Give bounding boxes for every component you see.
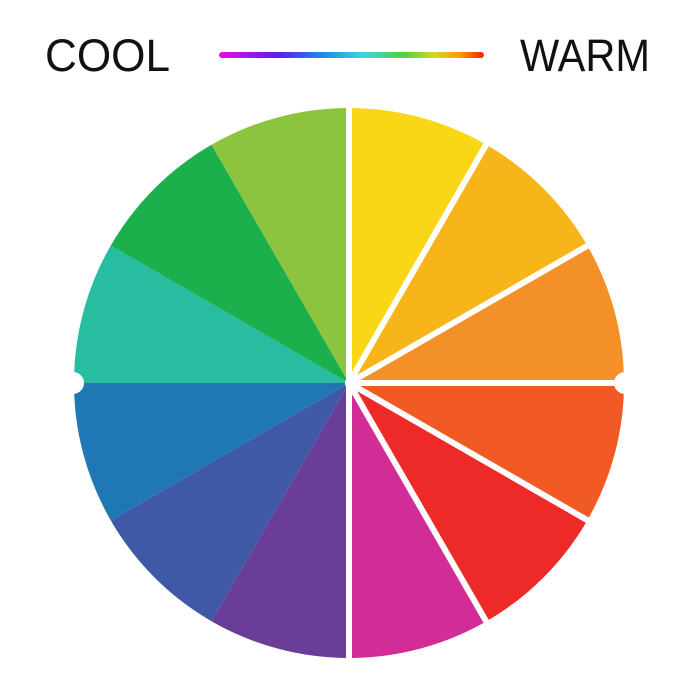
title: cool: COOL [45, 30, 170, 81]
gradient line [222, 52, 481, 58]
color wheel [62, 100, 636, 666]
title: warm: WARM [520, 30, 650, 81]
